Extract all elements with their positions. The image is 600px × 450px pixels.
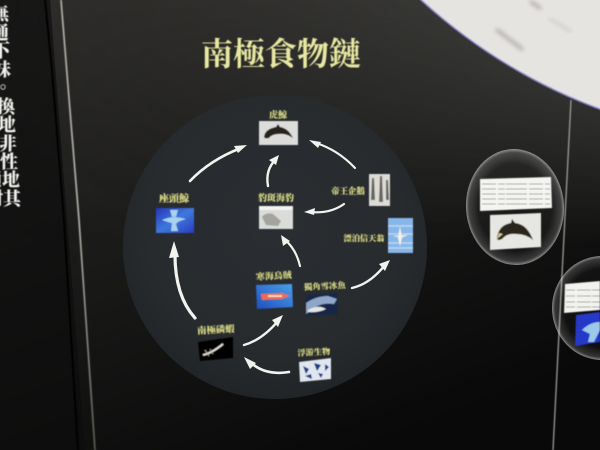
bubble image: orca xyxy=(490,213,541,250)
node: leopard seal: 豹斑海豹 xyxy=(258,192,294,203)
bubble text block: orca xyxy=(480,177,552,211)
arrow: icefish to leopard seal xyxy=(281,235,300,266)
food chain disc xyxy=(123,95,427,399)
info bubble: humpback whale xyxy=(552,256,600,360)
left panel text: 其 xyxy=(3,189,24,209)
left panel text: 性 xyxy=(0,152,18,172)
node: emperor penguin: 帝王企鵝 xyxy=(331,186,365,196)
info bubble: orca xyxy=(462,146,568,268)
node: plankton xyxy=(297,346,331,382)
bubble image: humpback whale xyxy=(575,312,600,346)
node: wandering albatross: 漂泊信天翁 xyxy=(344,233,385,243)
node: emperor penguin xyxy=(331,174,390,206)
node: plankton: 浮游生物 xyxy=(297,346,331,358)
node: antarctic squid xyxy=(256,269,293,309)
node: humpback whale: 座頭鯨 xyxy=(159,192,190,205)
node: leopard seal xyxy=(258,192,294,229)
node: orca xyxy=(259,109,298,145)
bubble text block: humpback whale xyxy=(564,281,600,313)
node: antarctic krill xyxy=(197,323,235,361)
node: humpback whale xyxy=(156,192,194,233)
left panel text xyxy=(0,3,24,209)
node: antarctic krill: 南極磷蝦 xyxy=(197,323,235,337)
background wall xyxy=(50,0,600,280)
arrow: humpback whale to orca xyxy=(190,145,247,181)
node: antarctic squid: 寒海烏賊 xyxy=(256,269,292,283)
title: 南極食物鏈 xyxy=(201,36,361,72)
node: icefish xyxy=(303,280,348,316)
arrow: icefish to albatross xyxy=(352,260,390,288)
arrow: krill to squid xyxy=(244,315,283,345)
arrow: krill to humpback whale xyxy=(169,241,195,318)
node: wandering albatross xyxy=(344,218,413,253)
node: icefish: 獨角雪冰魚 xyxy=(303,280,348,292)
arrow: emperor penguin to orca xyxy=(309,140,355,168)
planet earth edge xyxy=(244,0,600,144)
node: orca: 虎鯨 xyxy=(269,109,288,120)
left panel text: 地 xyxy=(2,169,20,190)
arrow: emperor penguin to leopard seal xyxy=(304,204,344,215)
arrow: leopard seal to orca xyxy=(267,155,279,186)
arrow: plankton to krill xyxy=(244,357,289,373)
